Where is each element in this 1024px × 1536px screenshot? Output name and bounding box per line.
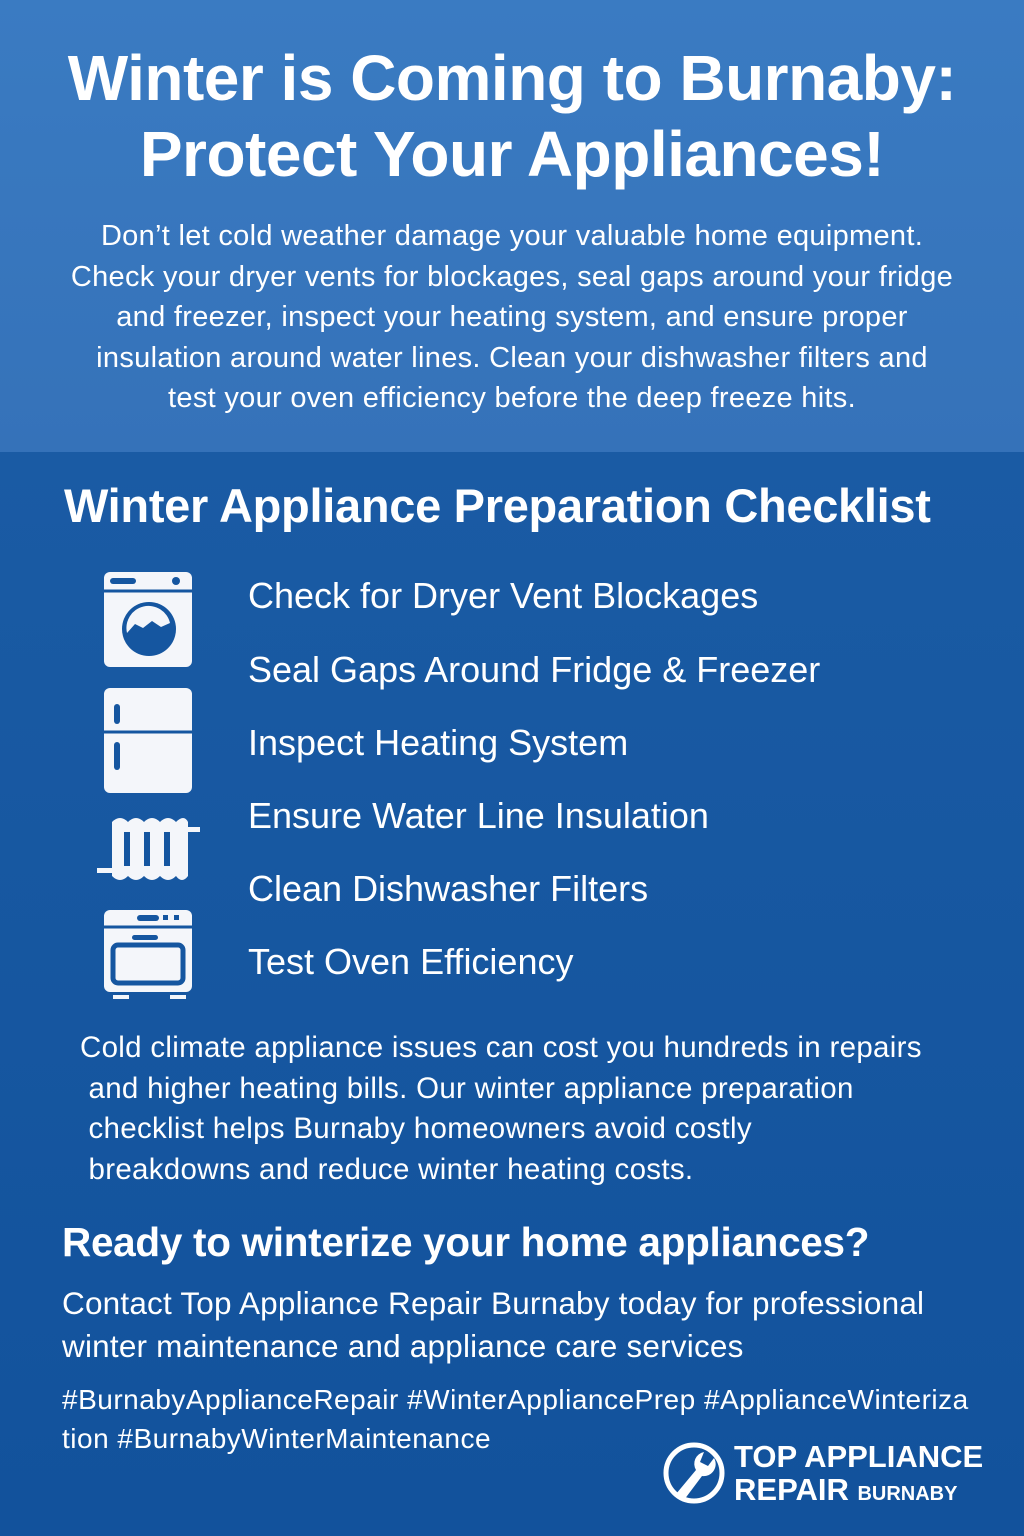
hashtags bbox=[62, 1384, 969, 1454]
contact text: Contact Top Appliance Repair Burnaby today for professional bbox=[62, 1285, 924, 1321]
hashtags: tion #BurnabyWinterMaintenance bbox=[62, 1423, 491, 1454]
item 1: Check for Dryer Vent Blockages bbox=[248, 575, 758, 616]
icon: wrench circle bbox=[664, 1442, 724, 1504]
intro text: Check your dryer vents for blockages, seal gaps around your fridge bbox=[71, 260, 953, 292]
checklist items bbox=[248, 575, 820, 982]
intro text: and freezer, inspect your heating system, and ensure proper bbox=[116, 301, 908, 333]
logo text: REPAIR BURNABY bbox=[734, 1472, 957, 1507]
cost paragraph bbox=[80, 1031, 922, 1186]
logo text: TOP APPLIANCE bbox=[734, 1439, 983, 1474]
intro text: test your oven efficiency before the deep freeze hits. bbox=[168, 382, 856, 414]
intro text: insulation around water lines. Clean your dishwasher filters and bbox=[96, 342, 928, 374]
title bbox=[68, 42, 956, 190]
intro text: Don’t let cold weather damage your valuable home equipment. bbox=[101, 220, 923, 252]
title: Protect Your Appliances! bbox=[140, 118, 884, 190]
item 4: Ensure Water Line Insulation bbox=[248, 795, 709, 836]
call to action heading: Ready to winterize your home appliances? bbox=[62, 1219, 869, 1265]
hashtags: #BurnabyApplianceRepair #WinterAppliancePrep #ApplianceWinteriza bbox=[62, 1384, 969, 1415]
cost paragraph: checklist helps Burnaby homeowners avoid costly bbox=[88, 1112, 752, 1145]
logo text bbox=[734, 1439, 983, 1507]
icon: radiator bbox=[97, 818, 200, 880]
item 3: Inspect Heating System bbox=[248, 722, 628, 763]
logo bbox=[664, 1439, 983, 1507]
icon: fridge bbox=[104, 688, 192, 793]
checklist heading: Winter Appliance Preparation Checklist bbox=[64, 479, 931, 532]
item 5: Clean Dishwasher Filters bbox=[248, 868, 648, 909]
contact text bbox=[62, 1285, 924, 1364]
cost paragraph: Cold climate appliance issues can cost you hundreds in repairs bbox=[80, 1031, 922, 1064]
cost paragraph: and higher heating bills. Our winter appliance preparation bbox=[88, 1072, 854, 1104]
title: Winter is Coming to Burnaby: bbox=[68, 42, 956, 114]
icons column bbox=[97, 572, 200, 999]
contact text: winter maintenance and appliance care services bbox=[62, 1328, 744, 1364]
item 2: Seal Gaps Around Fridge & Freezer bbox=[248, 649, 820, 690]
intro text bbox=[71, 220, 953, 414]
icon: washer/dryer bbox=[104, 572, 192, 667]
cost paragraph: breakdowns and reduce winter heating costs. bbox=[88, 1152, 693, 1186]
icon: oven bbox=[104, 910, 192, 999]
item 6: Test Oven Efficiency bbox=[248, 941, 573, 982]
